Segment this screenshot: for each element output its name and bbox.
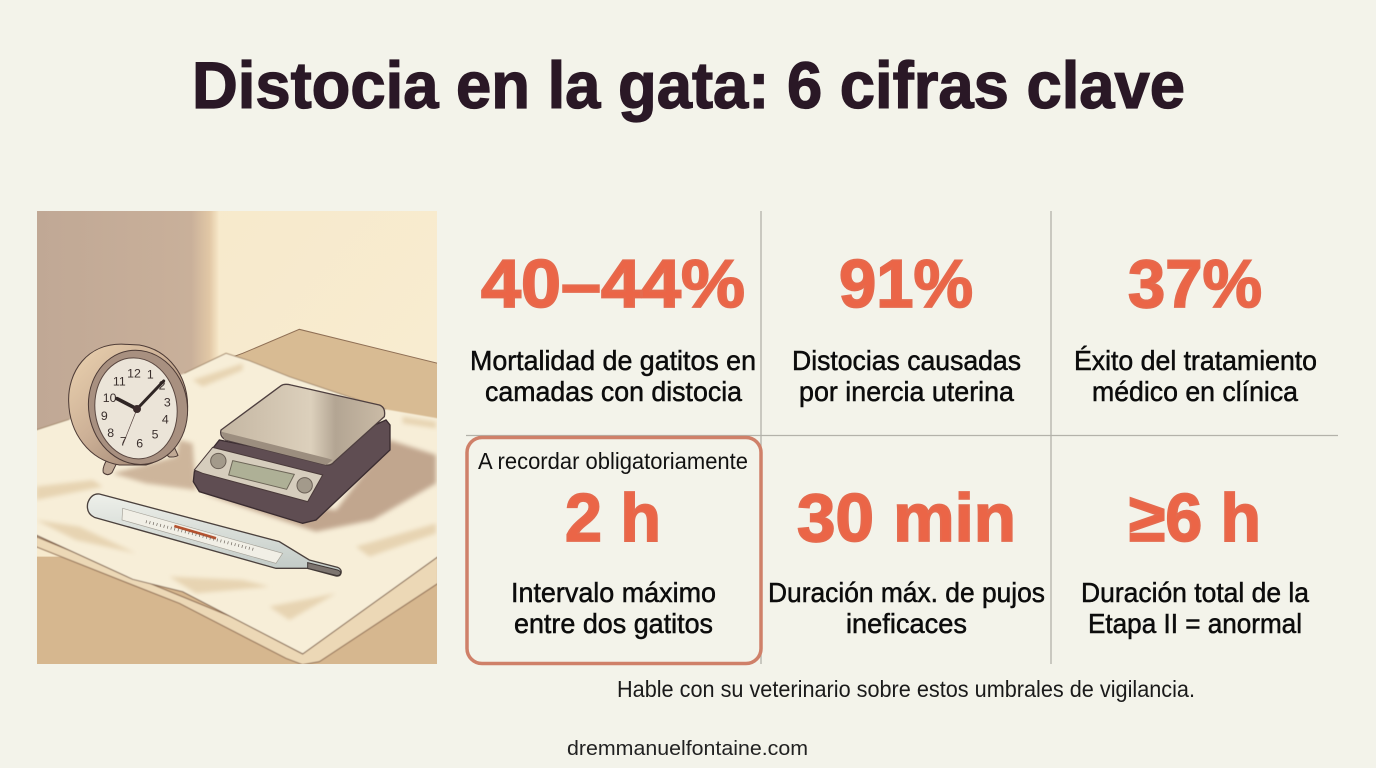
icon: alarm clock: 8 [107,426,114,440]
icon: alarm clock: 11 [113,375,126,389]
stat: 91% [792,246,1021,407]
stat: 40–44%: Mortalidad de gatitos en [470,345,756,376]
stat: 37%: Éxito del tratamiento [1074,345,1317,376]
stat: 37% [1074,246,1317,407]
icon: alarm clock: 5 [152,427,159,441]
icon: alarm clock [69,342,197,475]
table surface [183,328,437,419]
icon: alarm clock: 7 [120,435,127,449]
stat: 30 min [768,480,1045,639]
stat: 2 h [478,448,748,639]
stat: 30 min: Duración máx. de pujos [768,577,1045,608]
stat: 40–44%: camadas con distocia [485,376,743,407]
note: Hable con su veterinario sobre estos umbrales de vigilancia. [617,676,1195,702]
icon: alarm clock: 4 [162,412,169,426]
icon: alarm clock: 1 [147,368,154,382]
stat: 40–44% [470,246,756,407]
stat: 2 h: entre dos gatitos [514,608,713,639]
stat: 91%: Distocias causadas [792,345,1021,376]
stat: 40–44%: 40–44% [481,246,745,322]
stat: 37%: médico en clínica [1092,376,1299,407]
icon: alarm clock: 12 [127,366,141,380]
illustration: clock, scale and thermometer on a towel [36,210,438,665]
cast shadows [113,440,196,490]
icon: thermometer [87,494,341,576]
title: Distocia en la gata: 6 cifras clave [192,48,1185,122]
stat: 2 h: A recordar obligatoriamente [478,448,748,474]
icon: alarm clock: 9 [101,409,108,423]
stat: ≥6 h: ≥6 h [1129,480,1261,556]
footer website: dremmanuelfontaine.com [567,737,808,760]
icon: kitchen scale [193,384,390,523]
towel [36,353,438,665]
stat: ≥6 h: Etapa II = anormal [1088,608,1302,639]
stat: ≥6 h: Duración total de la [1081,577,1310,608]
stat: 2 h: Intervalo máximo [511,577,716,608]
stat: 91%: 91% [839,246,973,322]
icon: alarm clock: 2 [159,378,166,392]
towel folds [36,363,436,620]
stat: 30 min: ineficaces [846,608,967,639]
stat: 30 min: 30 min [797,480,1016,556]
stat: ≥6 h [1081,480,1310,639]
icon: alarm clock: 3 [164,395,171,409]
icon: alarm clock: 10 [103,391,117,405]
icon: alarm clock: 6 [136,436,143,450]
stat: 91%: por inercia uterina [799,376,1015,407]
grid dividers [466,211,1338,664]
stat: 37%: 37% [1128,246,1262,322]
callout box: highlighted figure [467,438,761,664]
stat: 2 h: 2 h [565,480,661,556]
